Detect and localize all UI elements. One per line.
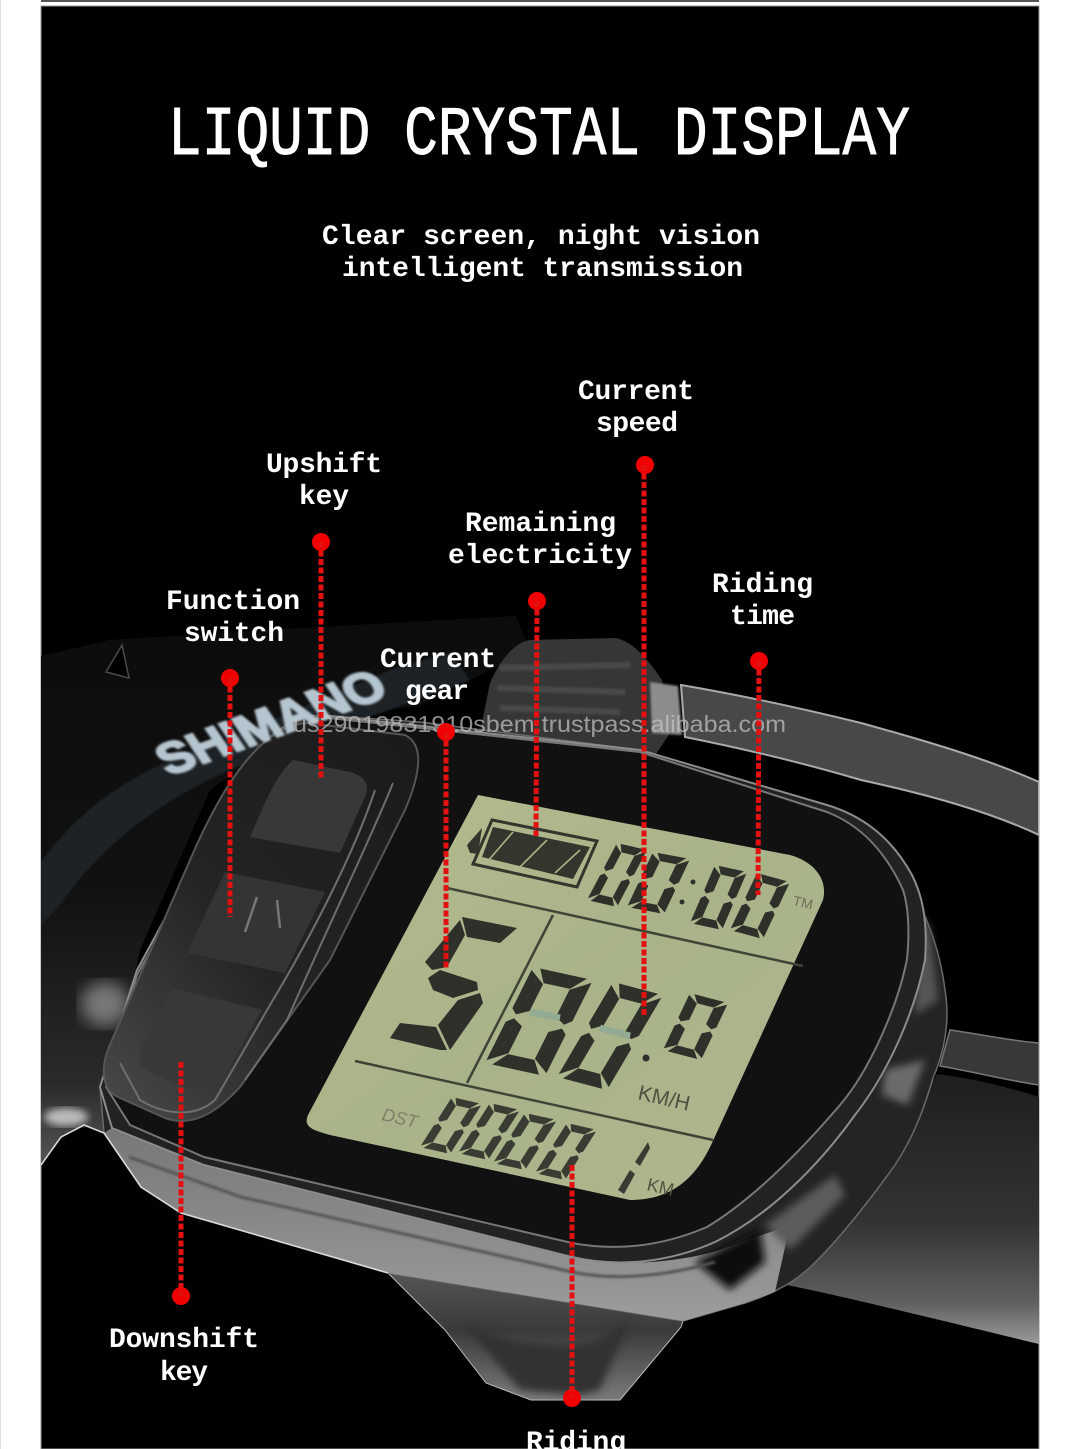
callout: remaining electricity xyxy=(448,509,632,836)
LCD unit labels: KM xyxy=(645,1174,676,1200)
LCD unit labels xyxy=(380,892,815,1200)
function icon on middle button xyxy=(245,897,280,932)
LCD unit labels: DST xyxy=(380,1104,422,1132)
callout: current gear: Current xyxy=(380,645,496,676)
skirt grooves xyxy=(129,1157,715,1277)
callout: function switch: switch xyxy=(184,619,284,650)
LCD digits: riding time xyxy=(587,843,790,939)
LCD digits: distance xyxy=(420,1097,650,1194)
cable connector xyxy=(480,638,670,757)
callout: riding time: time xyxy=(730,602,795,633)
callout: current gear xyxy=(380,645,496,969)
panel grooves xyxy=(120,783,393,1112)
photo: handlebar and display unit xyxy=(41,616,1039,1400)
callout: current speed: Current xyxy=(578,377,694,408)
callout: downshift key: Downshift xyxy=(109,1325,259,1356)
cable xyxy=(681,685,1039,835)
title: LIQUID CRYSTAL DISPLAY xyxy=(168,97,910,176)
light patch by lever edge xyxy=(44,1108,88,1126)
callout: upshift key: key xyxy=(299,482,349,513)
callout: current gear: gear xyxy=(405,677,469,708)
callout: function switch xyxy=(166,587,300,917)
LCD screen xyxy=(307,795,824,1200)
callout: riding time: Riding xyxy=(712,570,813,601)
callout: upshift key xyxy=(266,450,382,780)
bezel ring xyxy=(100,715,926,1262)
bezel outer band xyxy=(100,715,947,1321)
LCD digits: speed xyxy=(485,967,728,1090)
connector collar xyxy=(650,682,682,735)
right lower cable xyxy=(940,1030,1039,1085)
callout: upshift key: Upshift xyxy=(266,450,382,481)
callout: function switch: Function xyxy=(166,587,300,618)
button panel xyxy=(104,723,418,1121)
LCD digit: gear 5 xyxy=(390,917,517,1050)
battery icon xyxy=(467,820,597,887)
brand lettering: SHIMANO xyxy=(145,660,396,784)
right handlebar xyxy=(787,1074,1039,1344)
subtitle: intelligent transmission xyxy=(342,254,743,285)
lower button xyxy=(199,995,262,1048)
callout: remaining electricity: Remaining xyxy=(465,509,616,540)
lever band xyxy=(41,652,470,925)
callout: riding distance xyxy=(526,1165,626,1449)
callout: riding time xyxy=(712,570,813,895)
LCD unit labels: KM/H xyxy=(636,1081,692,1116)
upper button xyxy=(250,760,367,853)
LCD dividing lines xyxy=(355,888,803,1140)
watermark: us29019831910sbem.trustpass.alibaba.com xyxy=(293,711,786,737)
brake lever body xyxy=(41,616,530,1165)
lower clamp xyxy=(388,1273,690,1400)
callout: current speed: speed xyxy=(596,409,678,440)
light spot on grip xyxy=(81,982,129,1026)
bezel reflections xyxy=(695,885,938,1290)
middle button xyxy=(187,872,325,973)
bezel face xyxy=(106,717,908,1247)
bezel lower skirt xyxy=(104,1128,790,1321)
LCD unit labels: TM xyxy=(791,892,815,912)
callout: remaining electricity: electricity xyxy=(448,541,632,572)
lever notch xyxy=(106,645,129,678)
subtitle xyxy=(322,222,760,285)
lever edge halo xyxy=(41,1125,388,1273)
callout: downshift key xyxy=(109,1062,259,1389)
callout: downshift key: key xyxy=(160,1358,208,1389)
callout: current speed xyxy=(578,377,694,1017)
subtitle: Clear screen, night vision xyxy=(322,222,760,253)
